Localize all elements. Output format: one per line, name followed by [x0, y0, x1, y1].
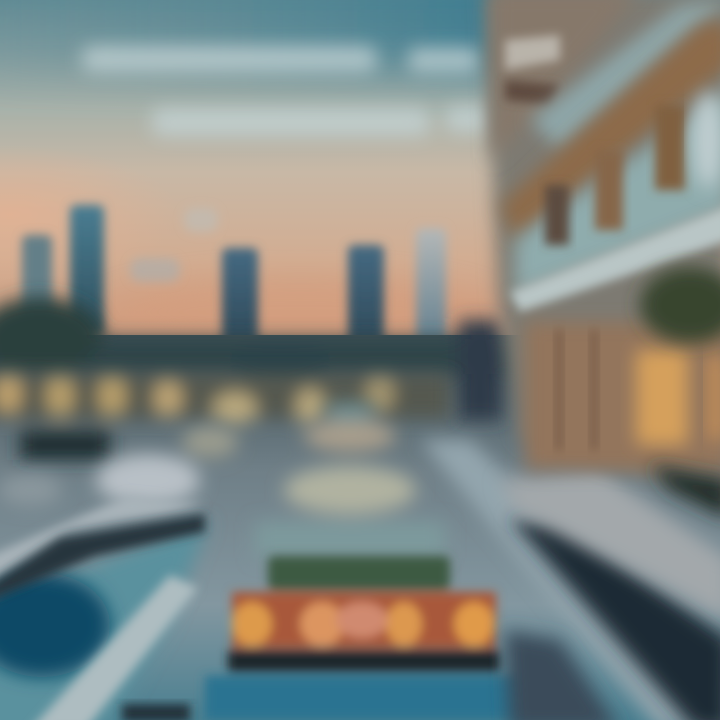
lit colonnade: [0, 374, 450, 460]
ground and pool deck: [0, 335, 720, 720]
flower bed with orange planter: [205, 556, 525, 720]
blurred headline text bands: [82, 46, 493, 136]
central fountain and walkway: [0, 402, 445, 558]
skyline towers: [22, 205, 446, 355]
tree line and dark horizon: [0, 297, 510, 420]
hotel building on the right: [485, 0, 720, 520]
right walkway and dark pool: [420, 440, 720, 720]
left pool: [0, 495, 210, 720]
sky background: [0, 0, 720, 347]
